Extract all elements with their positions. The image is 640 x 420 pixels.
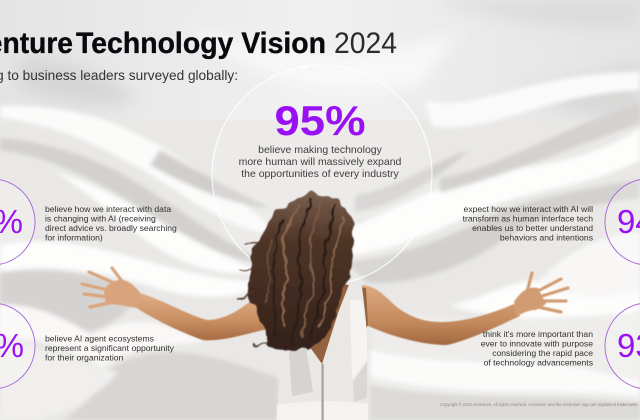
center circle outline [212,65,432,285]
stat: left top: believe how we interact with data [45,204,171,214]
stat: 95% center: believe making technology [258,144,383,156]
stat: right top: enables us to better understand [472,223,593,233]
stat: left top: is changing with AI (receiving [45,214,156,224]
stat: 95% center: more human will massively expand [239,156,402,168]
left arm and hand [82,268,272,340]
upper back [258,280,368,375]
stat: right top: behaviors and intentions [500,232,593,242]
stat: right top [463,179,640,265]
hair [236,193,354,350]
copyright: Copyright © 2024 Accenture. All rights reserved. Accenture and the Accenture logo are registered trademarks. [440,402,639,407]
stat: right top: expect how we interact with AI will [464,204,593,214]
woman figure from behind [82,193,568,420]
stat: left top: direct advice vs. broadly searching [45,223,177,233]
stat: left bottom: for their organization [45,352,124,362]
stat: right bottom: considering the rapid pace [492,348,593,358]
zipper [322,364,324,420]
stat: right bottom [481,303,640,389]
title: 2024 [334,27,397,60]
stat: 95% center: the opportunities of every industry [241,168,400,180]
title: Technology Vision [76,27,326,60]
stat: right top: transform as human interface tech [463,214,593,224]
stat: 95% center [239,97,402,180]
stat: left bottom [0,303,175,389]
right arm and hand [362,273,568,345]
stat: left bottom: believe AI agent ecosystems [45,334,154,344]
stat: 95% center: 95% [274,97,366,144]
stat: right bottom: ever to innovate with purpose [481,338,593,348]
white dress [276,282,368,420]
stat: right bottom: of technology advancements [484,358,593,368]
stat: left bottom: represent a significant opportunity [45,343,175,353]
stat: right bottom: think it's more important than [483,329,593,339]
stat: left top: for information) [45,232,103,242]
stat: left top [0,179,177,265]
title [0,27,397,60]
